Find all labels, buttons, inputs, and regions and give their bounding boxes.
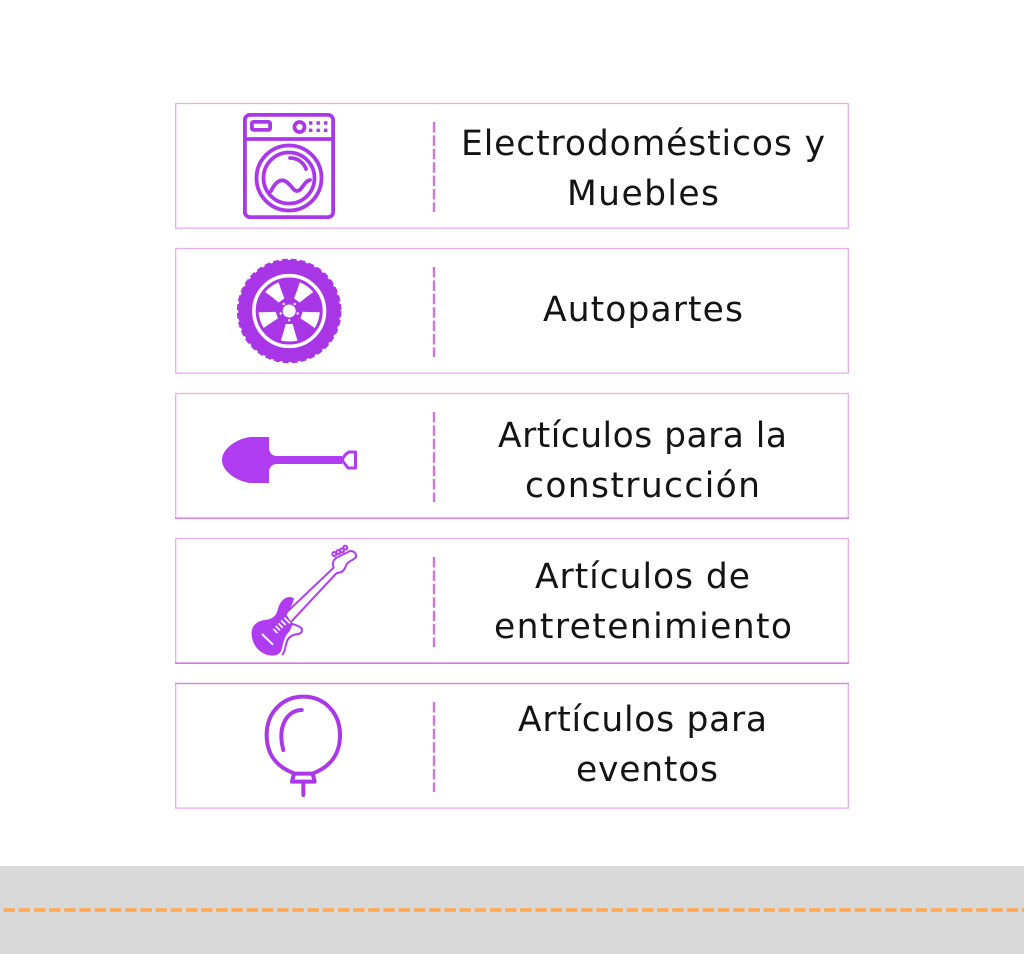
label: Artículos para eventos: eventos (576, 750, 718, 790)
panel: Electrodomésticos y Muebles (176, 104, 848, 228)
label: Electrodomésticos y Muebles (461, 124, 825, 214)
label: Autopartes: Autopartes (543, 290, 743, 330)
label: Artículos de entretenimiento: entretenimiento (494, 607, 792, 647)
footer band (0, 866, 1024, 954)
icon: washing machine (245, 115, 333, 217)
label: Artículos para la construcción (498, 416, 787, 506)
label: Electrodomésticos y Muebles: Electrodomésticos y (461, 124, 825, 164)
label: Artículos de entretenimiento: Artículos de (535, 557, 750, 597)
panel: Artículos para la construcción (175, 394, 849, 518)
icon: bass guitar (252, 546, 356, 656)
panel: Artículos para eventos (175, 684, 849, 808)
label: Artículos de entretenimiento (494, 557, 792, 647)
label: Artículos para la construcción: Artículos para la (498, 416, 787, 456)
panel: Artículos de entretenimiento (175, 538, 849, 663)
icon: tire (238, 260, 340, 362)
label: Artículos para eventos (518, 700, 767, 790)
label: Artículos para eventos: Artículos para (518, 700, 767, 740)
icon: shovel (222, 437, 356, 483)
icon: balloon (267, 697, 340, 795)
label: Artículos para la construcción: construcción (525, 466, 760, 506)
panel: Autopartes (176, 248, 848, 373)
label: Electrodomésticos y Muebles: Muebles (567, 174, 719, 214)
